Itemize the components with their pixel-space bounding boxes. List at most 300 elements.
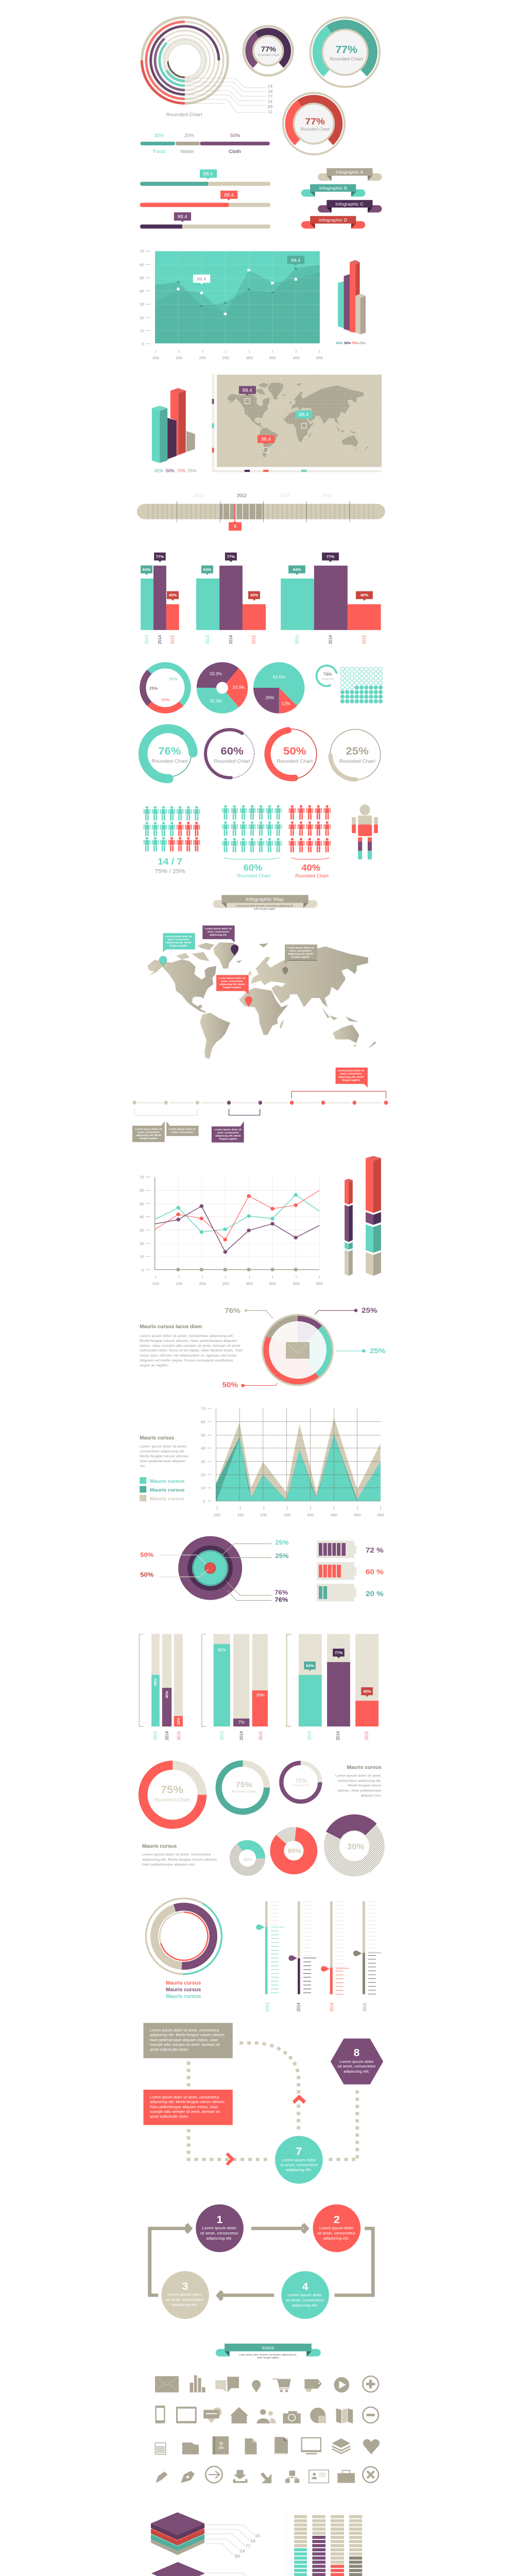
progress bar 2 <box>140 191 270 207</box>
layered stack exploded <box>151 2562 261 2576</box>
donut gauge purple <box>241 24 296 78</box>
flow box grey: amet sollicitudin dolor. <box>150 2047 189 2052</box>
people pictogram 14 of 7: 14 / 7 <box>158 856 182 867</box>
flow box red: amet sollicitudin dolor. <box>150 2114 189 2119</box>
bar chart group 2: 40% <box>250 593 259 597</box>
area chart x axis: 150 <box>176 355 183 360</box>
cycle circle 2: Lorem ipsum dolor <box>319 2226 354 2230</box>
icon: tag <box>304 2379 322 2393</box>
layered stack top <box>151 2512 261 2558</box>
hatched bars group 2: 7% <box>238 1720 245 1725</box>
line chart <box>140 1175 323 1286</box>
banner icons: Lorem ipsum dolor sit amet, consectetur adipiscing elit, <box>239 2353 297 2356</box>
callout purple <box>212 1121 244 1142</box>
battery 60: 60 % <box>366 1568 384 1577</box>
circle 7: Lorem ipsum dolor <box>282 2158 316 2162</box>
donut purple 75: Rounded Chart <box>293 1784 310 1786</box>
concentric rings <box>142 18 228 104</box>
3D bar chart <box>152 388 196 473</box>
flow box grey: suscipit odio semper sit amet. Aenean sit <box>150 2042 220 2047</box>
===== SECTION 1 ===== <box>140 13 384 229</box>
donut teal 75: Rounded Chart <box>232 1790 256 1793</box>
rounded chart 76: Rounded Chart <box>151 759 188 764</box>
peaks area chart <box>201 1406 384 1517</box>
donut red 75: Rounded Chart <box>154 1798 190 1803</box>
small 3D bar chart: 70% <box>352 342 358 345</box>
donut gauge teal <box>306 13 384 91</box>
ring legend: Mauris cursus <box>166 1993 201 1999</box>
callout purple with pin: amet, consectetur <box>208 930 229 934</box>
callout 25 teal <box>336 1347 386 1355</box>
map tag red <box>258 435 274 453</box>
timeline years <box>194 494 332 498</box>
hexagon 8: Lorem ipsum dolor <box>339 2059 374 2064</box>
segmented bar: 50% <box>230 133 240 138</box>
icon: cart <box>272 2379 291 2392</box>
small ring: Rounded Chart <box>322 678 334 680</box>
legend <box>140 1477 146 1484</box>
callout red <box>336 1067 368 1088</box>
hatched bars year labels: 2013 <box>153 1731 158 1740</box>
callout teal with pin: feugiat sagittis <box>169 944 187 947</box>
battery 60 <box>317 1562 384 1580</box>
target donut with leaders <box>140 1536 288 1603</box>
text block mauris cursus: metus, vitae suscipit odio semper sit amet. Aenean sit amet <box>140 1344 240 1348</box>
cycle circle 2: adipiscing elit. <box>323 2236 349 2241</box>
text block mauris cursus: turpis sem, ultricies vel ullamcorper id, egestas sed tortor. <box>140 1354 237 1358</box>
peaks area chart: 400 <box>354 1513 361 1517</box>
ring legend <box>166 1980 201 1999</box>
circle 7: 7 <box>296 2146 302 2157</box>
icon: plus circle <box>363 2376 379 2392</box>
text block mauris cursus: Aliquam vel mollis neque. Fusce consequat vestibulum <box>140 1359 233 1362</box>
icon: hierarchy <box>285 2470 299 2483</box>
pie chart: 62.5% <box>273 675 285 680</box>
icon: monitor <box>301 2438 321 2454</box>
icon: chat <box>203 2408 221 2423</box>
bar chart group 2: 77% <box>227 554 235 559</box>
segmented bar: Water <box>180 149 195 155</box>
bar values: 50% <box>166 469 175 473</box>
text block mauris cursus <box>140 1324 242 1367</box>
hatched bars year labels: 2014 <box>239 1731 244 1740</box>
bar chart group 1: 2014 <box>158 635 162 644</box>
timeline years: 2013 <box>194 494 204 498</box>
line chart axes: 60 <box>140 1188 145 1193</box>
line chart axes: 70 <box>140 1175 145 1179</box>
text block mauris cursus: sollicitudin dolor. Nunc at dui ligula, vitae facilisis turpis. Sed <box>140 1349 242 1352</box>
callout beige with pin <box>282 944 317 975</box>
icon: home <box>230 2407 248 2424</box>
hatched bars group 1 <box>139 1634 183 1726</box>
icon: heart <box>363 2439 380 2454</box>
icon: document <box>245 2438 256 2454</box>
circle 7 <box>275 2136 323 2184</box>
cycle circle 4 <box>281 2271 329 2319</box>
text block and legend: Mauris cursus <box>150 1487 184 1493</box>
arrow chevron up <box>293 2095 306 2104</box>
bar chart group 2: 2014 <box>229 635 233 644</box>
icon: diagonal arrow <box>262 2473 271 2483</box>
donut gauge red: Rounded Chart <box>300 127 330 131</box>
===== SECTION 2 ===== <box>137 249 385 531</box>
icon: close circle <box>363 2467 379 2483</box>
text block right aligned: Morbi feugiat rutrum <box>348 1784 382 1787</box>
bar chart group 3: 2015 <box>362 635 367 644</box>
area chart x axis: 300 <box>246 355 253 360</box>
bar chart group 1 <box>141 553 179 644</box>
map tag teal: 88.4 <box>299 412 308 417</box>
pie with hole: 33.3% <box>210 699 222 703</box>
bar chart group 3: 2014 <box>328 635 333 644</box>
leader values: 24 <box>268 99 273 104</box>
people pictogram 14 of 7 <box>144 806 200 874</box>
rounded chart 60: 60% <box>220 745 244 757</box>
peaks area chart: 150 <box>237 1513 244 1517</box>
hexagon 8: adipiscing elit. <box>344 2069 370 2074</box>
bar chart group 3: 40% <box>360 593 368 597</box>
line chart axes: 40 <box>140 1215 145 1219</box>
chart caption: Rounded Chart <box>166 112 202 118</box>
timeline years: 2015 <box>322 494 332 498</box>
line chart series <box>155 1195 319 1232</box>
peaks axes: 40 <box>201 1446 206 1451</box>
peaks area chart: 300 <box>307 1513 314 1517</box>
pie with hole: 33.3% <box>232 685 245 690</box>
leader values: 11 <box>268 110 272 114</box>
callout 76 <box>225 1307 273 1318</box>
icon: play <box>334 2377 349 2393</box>
text block left: Nam pellentesque aliquam nisi. <box>142 1863 196 1867</box>
flow box grey: adipiscing elit. Morbi feugiat rutrum ultrices. <box>150 2032 226 2037</box>
cycle circle 3: 3 <box>182 2281 188 2292</box>
line chart: 400 <box>293 1281 300 1286</box>
callout beige 1: feugiat sagittis <box>140 1137 158 1140</box>
callout purple with pin: adipiscing elit. <box>210 934 227 937</box>
area chart y axis: 20 <box>140 316 145 320</box>
small 3D bar chart: 25% <box>359 342 366 345</box>
text block right aligned: Lorem ipsum dolor sit amet, <box>335 1774 382 1778</box>
small 3D bar chart: 50% <box>344 342 351 345</box>
cycle circle 4: Lorem ipsum dolor <box>288 2293 322 2297</box>
flow box red: adipiscing elit. Morbi feugiat rutrum ultrices. <box>150 2099 226 2104</box>
battery 72: 72 % <box>366 1547 384 1554</box>
bar chart group 2: 2015 <box>251 635 256 644</box>
hatched bars year labels: 2015 <box>259 1731 263 1740</box>
bar values: 62% <box>154 469 163 473</box>
segmented bar: 20% <box>184 133 194 138</box>
triple ring <box>132 1885 235 1999</box>
peaks axes: 60 <box>201 1420 206 1424</box>
line chart axes: 20 <box>140 1242 145 1246</box>
callout purple: adipiscing elit. Morbi <box>215 1134 241 1138</box>
icon: calendar <box>155 2443 166 2454</box>
rounded chart 25: Rounded Chart <box>339 759 375 764</box>
peaks axes: 70 <box>201 1406 206 1411</box>
ribbon A: Infographic A <box>336 170 364 175</box>
icon: camera <box>283 2411 301 2424</box>
peaks area chart: 250 <box>284 1513 291 1517</box>
text block left: Lorem ipsum dolor sit amet, consectetur <box>142 1853 211 1856</box>
area chart y axis: 0 <box>142 342 144 346</box>
text block and legend <box>140 1435 190 1502</box>
bar chart group 1: 77% <box>156 554 164 559</box>
icon: pie <box>310 2408 326 2423</box>
people pictogram 14 of 7: 75% / 25% <box>155 868 185 874</box>
thermometer grey <box>353 1901 381 2012</box>
peaks area chart: 450 <box>377 1513 384 1517</box>
map shapes <box>227 383 368 457</box>
battery 20: 20 % <box>366 1590 384 1598</box>
callout beige with pin: amet, consectetur <box>289 950 312 953</box>
people pictogram teal 60: Rounded Chart <box>237 873 271 878</box>
segmented bar: Cloth <box>229 149 241 155</box>
icon: download <box>233 2470 247 2483</box>
text block and legend: Mauris cursus <box>150 1496 184 1502</box>
timeline years: 2014 <box>280 494 289 498</box>
bar chart group 1: 40% <box>169 593 177 597</box>
text block mauris cursus: Morbi feugiat rutrum ultrices. Nam pellentesque aliquam <box>140 1339 237 1343</box>
pie with hole <box>200 666 245 710</box>
line chart: 300 <box>246 1281 253 1286</box>
callout beige with pin: feugiat sagittis <box>291 956 310 959</box>
leader values: 77 <box>268 95 273 99</box>
icon: tablet <box>176 2406 197 2424</box>
people pictogram red 40: Rounded Chart <box>295 873 329 878</box>
target values <box>140 1539 288 1603</box>
donut chart: 25% <box>161 698 169 702</box>
line chart axes: 50 <box>140 1202 145 1206</box>
icon: documents <box>274 2437 288 2454</box>
small 3D bar chart: 62% <box>336 342 343 345</box>
donut gauge teal: Rounded Chart <box>330 57 363 61</box>
hatched bars year labels: 2015 <box>364 1731 369 1740</box>
donut 30: 30% <box>347 1842 365 1852</box>
line chart axes: 0 <box>142 1268 144 1273</box>
hatched bars group 2: 90% <box>217 1648 226 1653</box>
text block and legend: nisi. <box>140 1465 146 1468</box>
layered stack top: 18 <box>250 2538 255 2544</box>
area chart teal panel <box>155 251 320 343</box>
callout red with pin: adipiscing elit. Morbi <box>219 983 245 986</box>
layered stack top: 89 <box>235 2554 240 2558</box>
donut purple 75 <box>281 1763 320 1802</box>
area chart x axis: 450 <box>316 355 323 360</box>
callout red: amet, consectetur <box>340 1073 362 1076</box>
callout beige 2 <box>166 1121 199 1136</box>
callout beige with pin: adipiscing elit. Morbi <box>288 953 313 956</box>
segmented level bars <box>286 2515 356 2576</box>
donut 50: 50% <box>244 1857 252 1862</box>
cycle circle 4: sit amet, consectetur <box>286 2298 324 2302</box>
banner infographic map: tellus feugiat sagittis <box>254 908 276 910</box>
dotted flow connectors <box>188 2043 357 2159</box>
callout beige 2: Lorem ipsum dolor sit <box>169 1128 196 1131</box>
flow box red <box>143 2090 233 2125</box>
bar values: 70% <box>177 469 185 473</box>
hatched bars group 3: 40% <box>363 1689 371 1694</box>
peaks axes: 30 <box>201 1460 206 1464</box>
ring chart with leaders <box>142 18 273 118</box>
callout teal with pin: Lorem ipsum dolor sit <box>165 935 192 938</box>
callout 76: 76% <box>225 1307 241 1315</box>
cycle circle 3: sit amet, consectetur <box>166 2297 204 2302</box>
donut red 75: 75% <box>161 1784 183 1796</box>
small 3D bar chart <box>336 260 366 345</box>
battery 72 <box>317 1540 384 1558</box>
banner icons: Icons <box>262 2345 274 2351</box>
layered stack top: 24 <box>255 2533 261 2538</box>
leader values: 89 <box>268 105 273 109</box>
peaks axes: 10 <box>201 1486 206 1490</box>
ribbon D <box>301 216 365 229</box>
leader values: 18 <box>268 90 273 94</box>
area chart x axis: 350 <box>269 355 276 360</box>
segmented bar <box>141 133 270 155</box>
flow box red: Nam pellentesque aliquam metus, vitae <box>150 2105 218 2109</box>
peaks area chart: 100 <box>213 1513 221 1517</box>
===== SECTION 6 ===== <box>139 1406 384 1726</box>
donut teal 75: 75% <box>236 1781 252 1789</box>
line chart axes: 30 <box>140 1228 145 1232</box>
flow box grey <box>143 2023 233 2058</box>
callout red with pin <box>216 975 252 1007</box>
icon: briefcase <box>337 2470 355 2483</box>
progress bar 1 <box>140 170 270 186</box>
donut chart: 50% <box>169 677 178 681</box>
area chart x axis: 200 <box>199 355 207 360</box>
donut 80 <box>276 1832 312 1869</box>
hatched bars year labels: 2013 <box>307 1731 312 1740</box>
map tag purple: 88.4 <box>243 388 252 393</box>
line chart: 150 <box>176 1281 183 1286</box>
===== SECTION 9 ===== <box>151 2344 380 2576</box>
text block and legend: Mauris cursus <box>150 1479 184 1484</box>
bar chart group 1: 64% <box>143 567 151 572</box>
area chart y axis: 10 <box>140 329 145 333</box>
text block mauris cursus: augue ac sagittis. <box>140 1364 169 1367</box>
rounded chart 60: Rounded Chart <box>214 759 250 764</box>
hatched bars year labels <box>153 1731 369 1740</box>
text block mauris cursus: Lorem ipsum dolor sit amet, consectetur adipiscing elit. <box>140 1334 234 1338</box>
ribbon A <box>318 168 382 181</box>
callout purple: feugiat sagittis <box>219 1138 237 1141</box>
leaders and values <box>207 2525 255 2555</box>
cycle circle 2: sit amet, consectetur <box>317 2231 356 2235</box>
icon: bars <box>190 2375 205 2393</box>
callout teal with pin <box>159 933 195 966</box>
bar chart group 2: 2013 <box>205 635 210 644</box>
callout beige 1: amet, consectetur <box>138 1131 160 1134</box>
banner infographic map <box>213 895 317 910</box>
line chart: 200 <box>199 1281 207 1286</box>
cycle circle 4: adipiscing elit. <box>292 2303 318 2308</box>
icon: pin <box>252 2380 261 2393</box>
map tag red: 88.4 <box>261 437 271 442</box>
ribbon C: Infographic C <box>335 201 364 207</box>
small ring: 76% <box>323 672 332 676</box>
area chart x axis: 100 <box>152 355 160 360</box>
callout red with pin: Lorem ipsum dolor sit <box>219 977 246 980</box>
callout beige with pin: Lorem ipsum dolor sit <box>287 946 314 950</box>
timeline brackets <box>291 1091 386 1098</box>
cycle circle 1: sit amet, consectetur <box>200 2231 238 2235</box>
hatched bars year labels: 2014 <box>336 1731 340 1740</box>
bar chart group 2: 64% <box>203 567 212 572</box>
callout 25 purple: 25% <box>362 1307 377 1315</box>
hatched bars group 3: 77% <box>335 1651 343 1655</box>
target values: 76% <box>274 1589 288 1596</box>
hexagon 8: 8 <box>354 2047 359 2059</box>
progress bar 1: 88.4 <box>203 172 213 176</box>
hatched bars group 2: 30% <box>256 1693 265 1698</box>
pie chart: 12% <box>282 702 290 706</box>
===== SECTION 3 ===== <box>133 553 383 878</box>
data markers <box>177 269 297 315</box>
leaders and values <box>207 2573 255 2576</box>
layered stack top: 77 <box>245 2544 250 2549</box>
donut chart <box>133 656 197 720</box>
cycle circle 4: 4 <box>302 2281 308 2293</box>
hatched bars group 1: 10% <box>176 1718 181 1725</box>
text block and legend: consectetur adipiscing elit. <box>140 1450 185 1453</box>
cycle circle 1: 1 <box>217 2214 222 2226</box>
hexagon 8 <box>331 2039 383 2084</box>
people pictogram red 40 <box>289 805 331 878</box>
text block left <box>142 1844 218 1867</box>
thermometer purple <box>288 1901 316 2012</box>
progress bar 2: 88.4 <box>224 193 234 197</box>
leader lines <box>186 78 267 113</box>
callout beige 1: adipiscing elit. Morbi <box>136 1134 161 1137</box>
callout red: adipiscing elit. Morbi <box>338 1076 364 1079</box>
timeline marker <box>234 504 235 521</box>
donut chart: 25% <box>149 686 158 690</box>
text block and legend: Lorem ipsum dolor sit amet, <box>140 1445 187 1449</box>
progress bar 3: 88.4 <box>178 214 187 219</box>
hatched bars year labels: 2013 <box>219 1731 224 1740</box>
thermometer purple: 2014 <box>296 2003 301 2012</box>
cycle circle 2: 2 <box>334 2214 340 2226</box>
rounded chart 76: 76% <box>158 745 181 757</box>
flow box grey: Lorem ipsum dolor sit amet, consectetur <box>150 2028 219 2032</box>
icon: arrow circle <box>205 2466 222 2483</box>
text block mauris cursus: Mauris cursus lacus diam <box>140 1324 202 1330</box>
donut 30 <box>322 1814 386 1878</box>
segmented bar: Food <box>153 149 165 155</box>
cycle circle 3 <box>161 2271 209 2319</box>
chart tags <box>193 275 210 283</box>
people pictogram teal 60 <box>222 805 282 878</box>
flow box red: Lorem ipsum dolor sit amet, consectetur <box>150 2095 219 2099</box>
bar values: 25% <box>188 469 196 473</box>
icon: pen <box>181 2471 195 2483</box>
donut 80: 80% <box>288 1848 301 1854</box>
area chart y axis: 60 <box>140 263 145 267</box>
text block left: adipiscing elit. Morbi feugiat rutrum ultrices. <box>142 1858 218 1861</box>
line chart: 350 <box>269 1281 276 1286</box>
dotted world map panel <box>212 375 382 472</box>
pie with hole: 33.3% <box>210 672 222 676</box>
hatched bars group 3: 64% <box>306 1664 314 1668</box>
text block left: Mauris cursus <box>142 1844 177 1849</box>
area chart x axis <box>152 350 323 360</box>
world map <box>147 942 377 1060</box>
rounded chart 76 <box>142 728 194 779</box>
area chart y axis <box>140 249 150 346</box>
progress bar 3 <box>140 212 270 229</box>
icon: minus circle <box>363 2407 379 2423</box>
